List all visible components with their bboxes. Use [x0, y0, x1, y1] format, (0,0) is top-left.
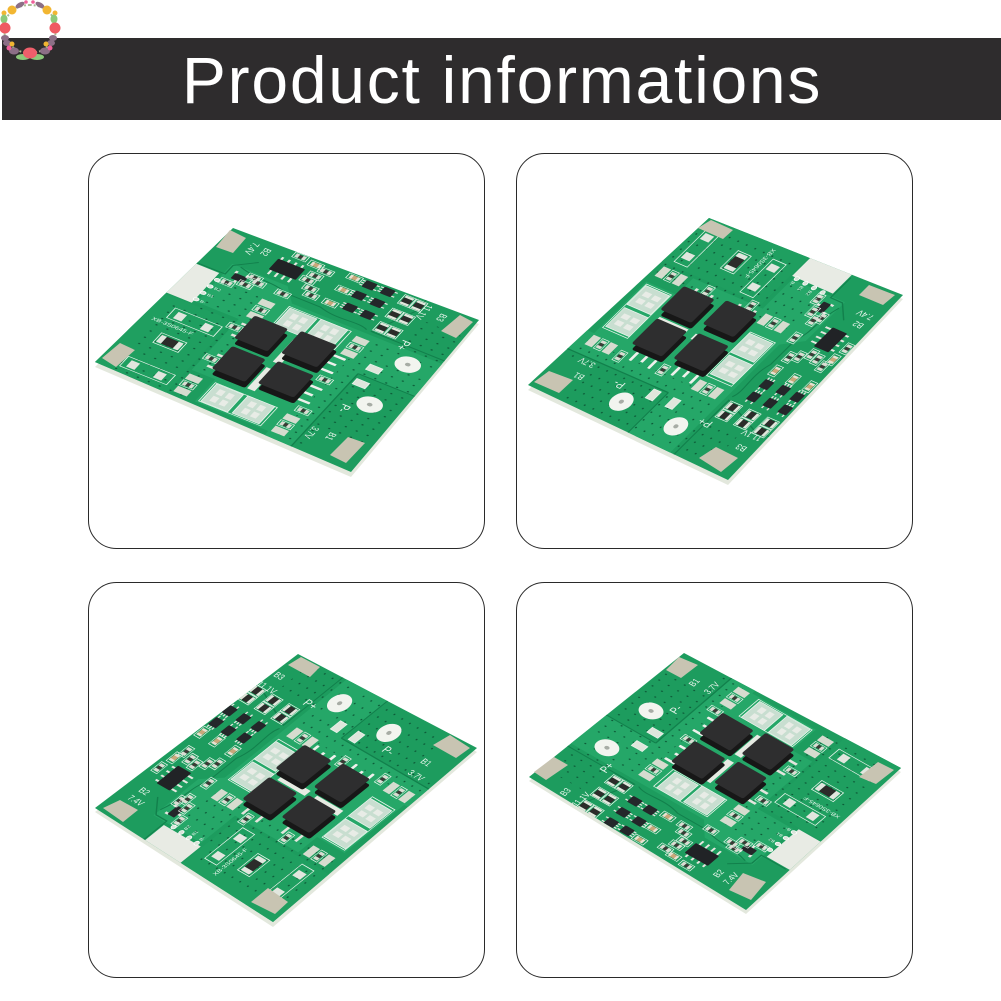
title banner [2, 38, 1001, 120]
MOSFET tops [207, 313, 341, 401]
silkscreen labels: B1 [205, 293, 215, 299]
silkscreen labels: B2 [767, 837, 776, 843]
silkscreen labels: 7.4V [125, 793, 147, 808]
board edge [528, 222, 903, 485]
silkscreen labels: B1 [775, 831, 784, 838]
panel: bottom left product view [75, 582, 502, 978]
silkscreen labels: B2 [850, 319, 866, 330]
MOSFET sides [628, 289, 760, 380]
silkscreen labels: XB-3S0645-F [742, 248, 777, 279]
corner solder pads [534, 220, 895, 472]
silkscreen labels: 3.7V [301, 425, 322, 440]
silkscreen labels: B+ [813, 294, 822, 301]
silkscreen labels: B1 [570, 370, 587, 382]
title: Product informations [182, 43, 822, 117]
MOSFET sides [207, 319, 341, 407]
silkscreen labels: B1 [418, 757, 435, 768]
panel: top left product view [72, 154, 503, 548]
silkscreen labels: XB-3S0645-F [150, 316, 195, 337]
MOSFET sides [668, 716, 798, 807]
silkscreen labels: P- [667, 703, 686, 716]
silkscreen labels: B1 [796, 285, 804, 292]
silkscreen labels: B2 [804, 290, 813, 296]
silkscreen labels: B1 [686, 676, 703, 688]
silkscreen labels: B2 [136, 785, 153, 797]
silkscreen labels: P+ [299, 698, 320, 712]
board edge [95, 658, 477, 927]
MOSFET tops [239, 742, 374, 836]
silkscreen labels: 7.4V [720, 870, 742, 886]
silkscreen labels: 11.1V [569, 790, 593, 808]
corner solder pads [102, 230, 473, 463]
circuit board top [95, 654, 477, 922]
silkscreen labels: B- [198, 836, 207, 842]
silkscreen labels: 11.1V [254, 679, 280, 696]
silkscreen labels: P+ [597, 761, 618, 775]
corner solder pads [534, 657, 894, 900]
panel: top right product view [504, 154, 923, 548]
silkscreen labels: 3.7V [701, 680, 723, 696]
MOSFET sides [239, 748, 374, 842]
silkscreen labels [554, 671, 885, 901]
silkscreen labels: XB-3S0645-F [802, 795, 842, 819]
silkscreen labels: 11.1V [738, 428, 765, 443]
silkscreen labels: 11.1V [412, 303, 436, 321]
silkscreen labels: B3 [433, 312, 450, 323]
circuit traces and components [95, 252, 461, 446]
silkscreen labels: P+ [393, 338, 413, 352]
silkscreen labels: B1 [191, 830, 200, 837]
icon: floral wreath logo [0, 0, 60, 60]
silkscreen labels: 3.7V [575, 356, 598, 370]
silkscreen labels [113, 227, 452, 447]
silkscreen labels: XB-3S0645-F [212, 847, 250, 877]
MOSFET tops [668, 710, 798, 801]
silkscreen labels: B2 [257, 247, 274, 258]
silkscreen labels: 7.4V [854, 308, 876, 322]
board edge [529, 657, 901, 914]
silkscreen labels: B2 [710, 868, 727, 879]
silkscreen labels: B- [198, 299, 207, 305]
silkscreen labels: B3 [557, 786, 574, 798]
circuit traces and components [566, 218, 856, 455]
circuit traces and components [144, 669, 434, 922]
silkscreen labels [101, 668, 442, 906]
silkscreen labels: B1 [323, 431, 339, 442]
silkscreen labels: P+ [695, 415, 716, 429]
corner solder pads [103, 657, 470, 914]
silkscreen labels: B2 [183, 824, 193, 831]
silkscreen labels: B+ [219, 280, 229, 287]
silkscreen labels: B+ [759, 843, 768, 849]
silkscreen labels [563, 224, 899, 455]
silkscreen labels: B- [784, 826, 792, 832]
circuit board top [528, 218, 903, 480]
circuit board top [529, 653, 901, 910]
silkscreen labels: P- [378, 745, 397, 758]
panel: bottom right product view [509, 582, 926, 978]
silkscreen labels: B3 [733, 442, 749, 454]
MOSFET tops [628, 283, 760, 374]
silkscreen labels: 3.7V [405, 768, 427, 783]
board edge [95, 232, 479, 477]
silkscreen labels: P- [334, 402, 353, 414]
silkscreen labels: P- [610, 377, 629, 390]
circuit traces and components [560, 674, 901, 872]
silkscreen labels: B3 [271, 670, 288, 682]
silkscreen labels: B+ [175, 819, 185, 826]
silkscreen labels: 7.4V [241, 241, 262, 256]
silkscreen labels: B- [788, 281, 796, 286]
silkscreen labels: B2 [212, 287, 222, 293]
circuit board top [95, 228, 479, 472]
